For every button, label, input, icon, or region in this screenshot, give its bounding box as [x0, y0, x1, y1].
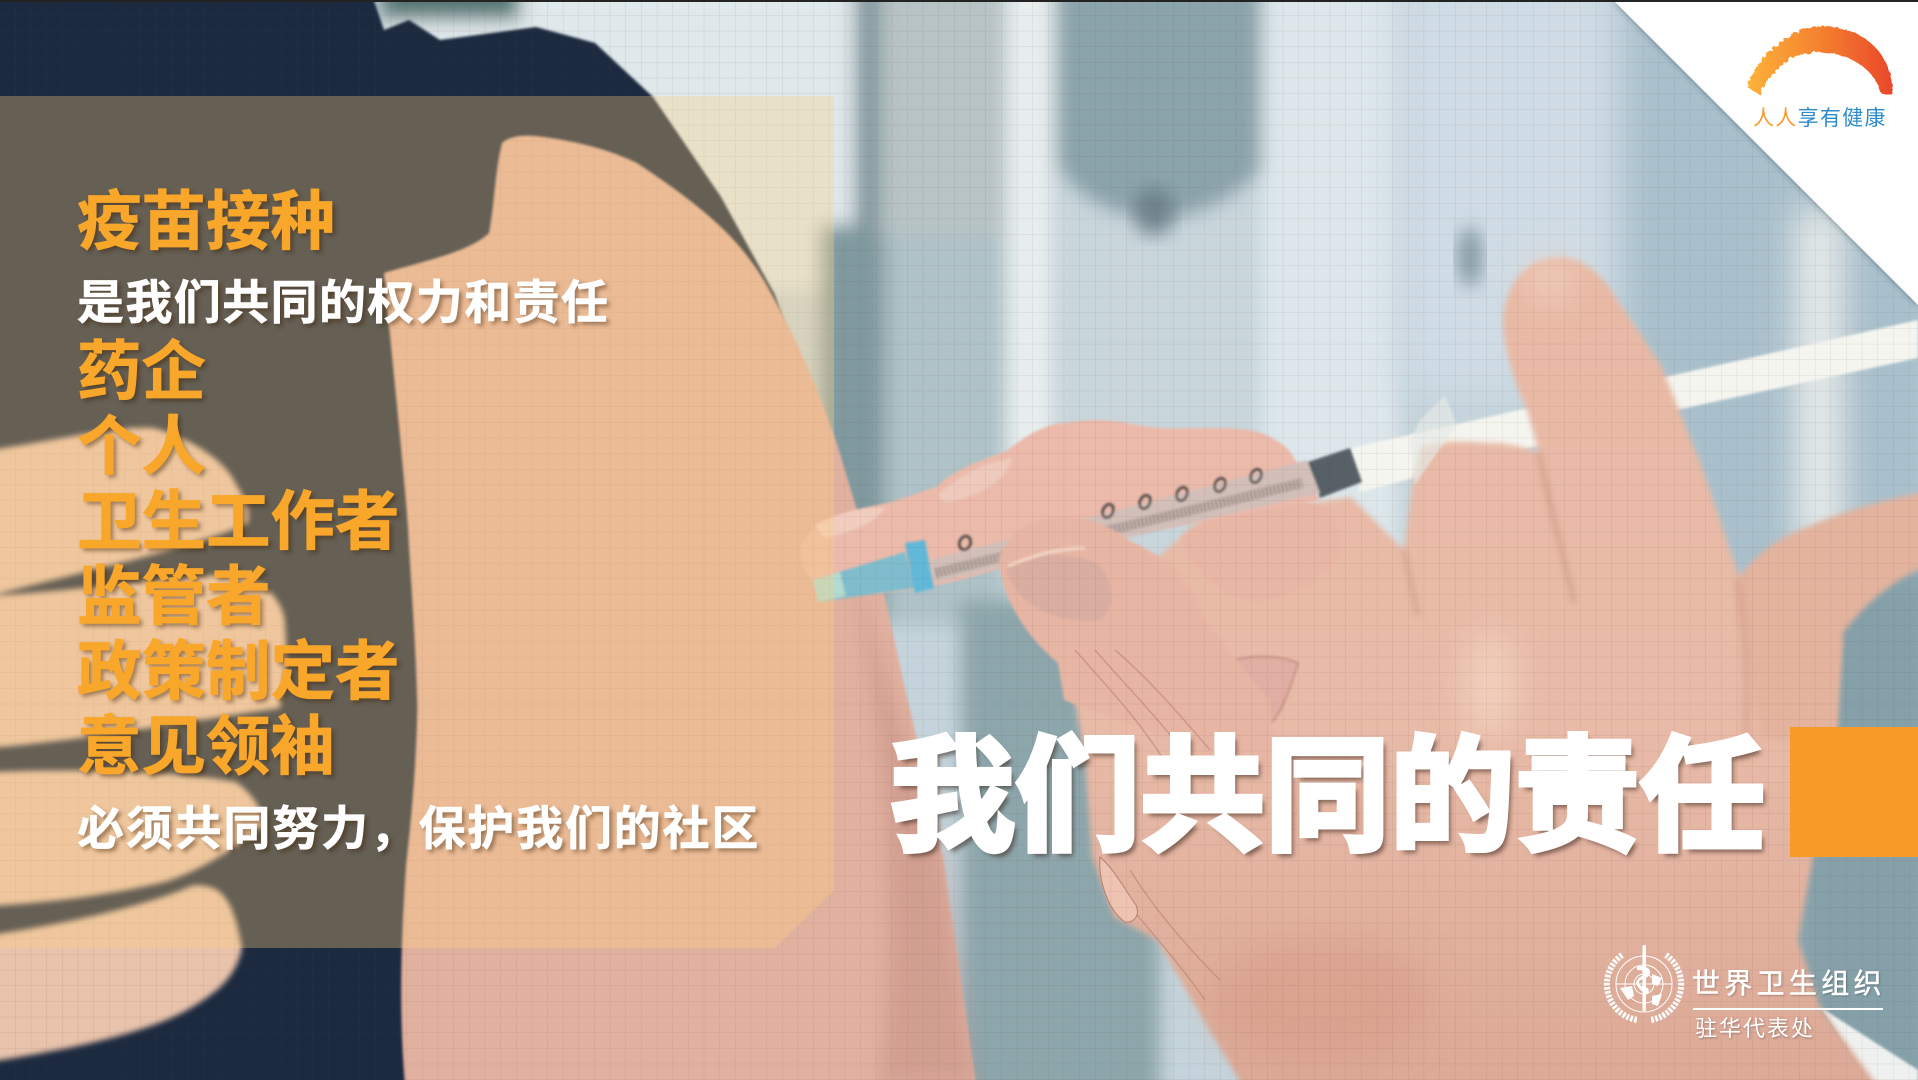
list item: regulators: 监管者 [77, 561, 271, 633]
left hand holding the arm [0, 428, 286, 1062]
WHO China office logo [1604, 945, 1886, 1041]
title: 我们共同的责任 [890, 728, 1765, 867]
middle finger under syringe [1181, 500, 1339, 601]
flange [1410, 395, 1457, 485]
needle hub [813, 552, 915, 602]
wall spot shadow [1458, 227, 1482, 287]
text block: vaccination responsibility list [77, 186, 762, 855]
syringe [813, 395, 1457, 602]
divider [1693, 1008, 1883, 1010]
far wall gradient [1397, 0, 1918, 1080]
list item: pharma: 药企 [77, 336, 206, 408]
syringe plunger [1351, 320, 1918, 492]
orange accent block [1790, 727, 1918, 857]
door latch shadow [1134, 188, 1174, 236]
hand wrinkles [1075, 650, 1220, 1000]
list item: opinion leaders: 意见领袖 [77, 711, 335, 783]
knuckle and finger shading [1404, 453, 1747, 760]
subheading: shared right and responsibility: 是我们共同的权力和责任 [77, 276, 609, 329]
top dark edge [0, 0, 1918, 2]
icon: WHO emblem [1604, 945, 1684, 1023]
plunger seal [1308, 448, 1362, 498]
list item: individuals: 个人 [77, 411, 206, 483]
palm fold [1100, 857, 1137, 922]
patient's arm [384, 136, 976, 1080]
list item: health workers: 卫生工作者 [77, 486, 400, 558]
index fingernail [815, 508, 885, 538]
WHO name: 世界卫生组织 [1692, 968, 1886, 999]
palm and out-of-focus fingers [1064, 257, 1877, 1080]
WHO China office: 驻华代表处 [1695, 1016, 1815, 1041]
thumb [999, 517, 1280, 780]
patient's navy shirt [0, 0, 790, 1080]
barrel [930, 460, 1320, 583]
palm highlights [1210, 256, 1570, 1060]
right out-of-focus finger [1738, 492, 1918, 740]
white counter wedge [1820, 1007, 1918, 1080]
list item: policy makers: 政策制定者 [77, 636, 400, 708]
index finger [800, 420, 1320, 593]
closing sentence: 必须共同努力，保护我们的社区 [77, 802, 760, 855]
number marks [957, 468, 1263, 551]
scale marks [936, 483, 1302, 573]
second fingernail [938, 458, 1012, 503]
heading: vaccination: 疫苗接种 [77, 186, 335, 258]
syringe-holding hand [800, 256, 1918, 1080]
logo text: 人人享有健康 [1753, 107, 1887, 130]
shaded edge of arm [850, 560, 976, 1080]
finger pocket [1234, 657, 1298, 722]
logo arc [1747, 26, 1893, 95]
